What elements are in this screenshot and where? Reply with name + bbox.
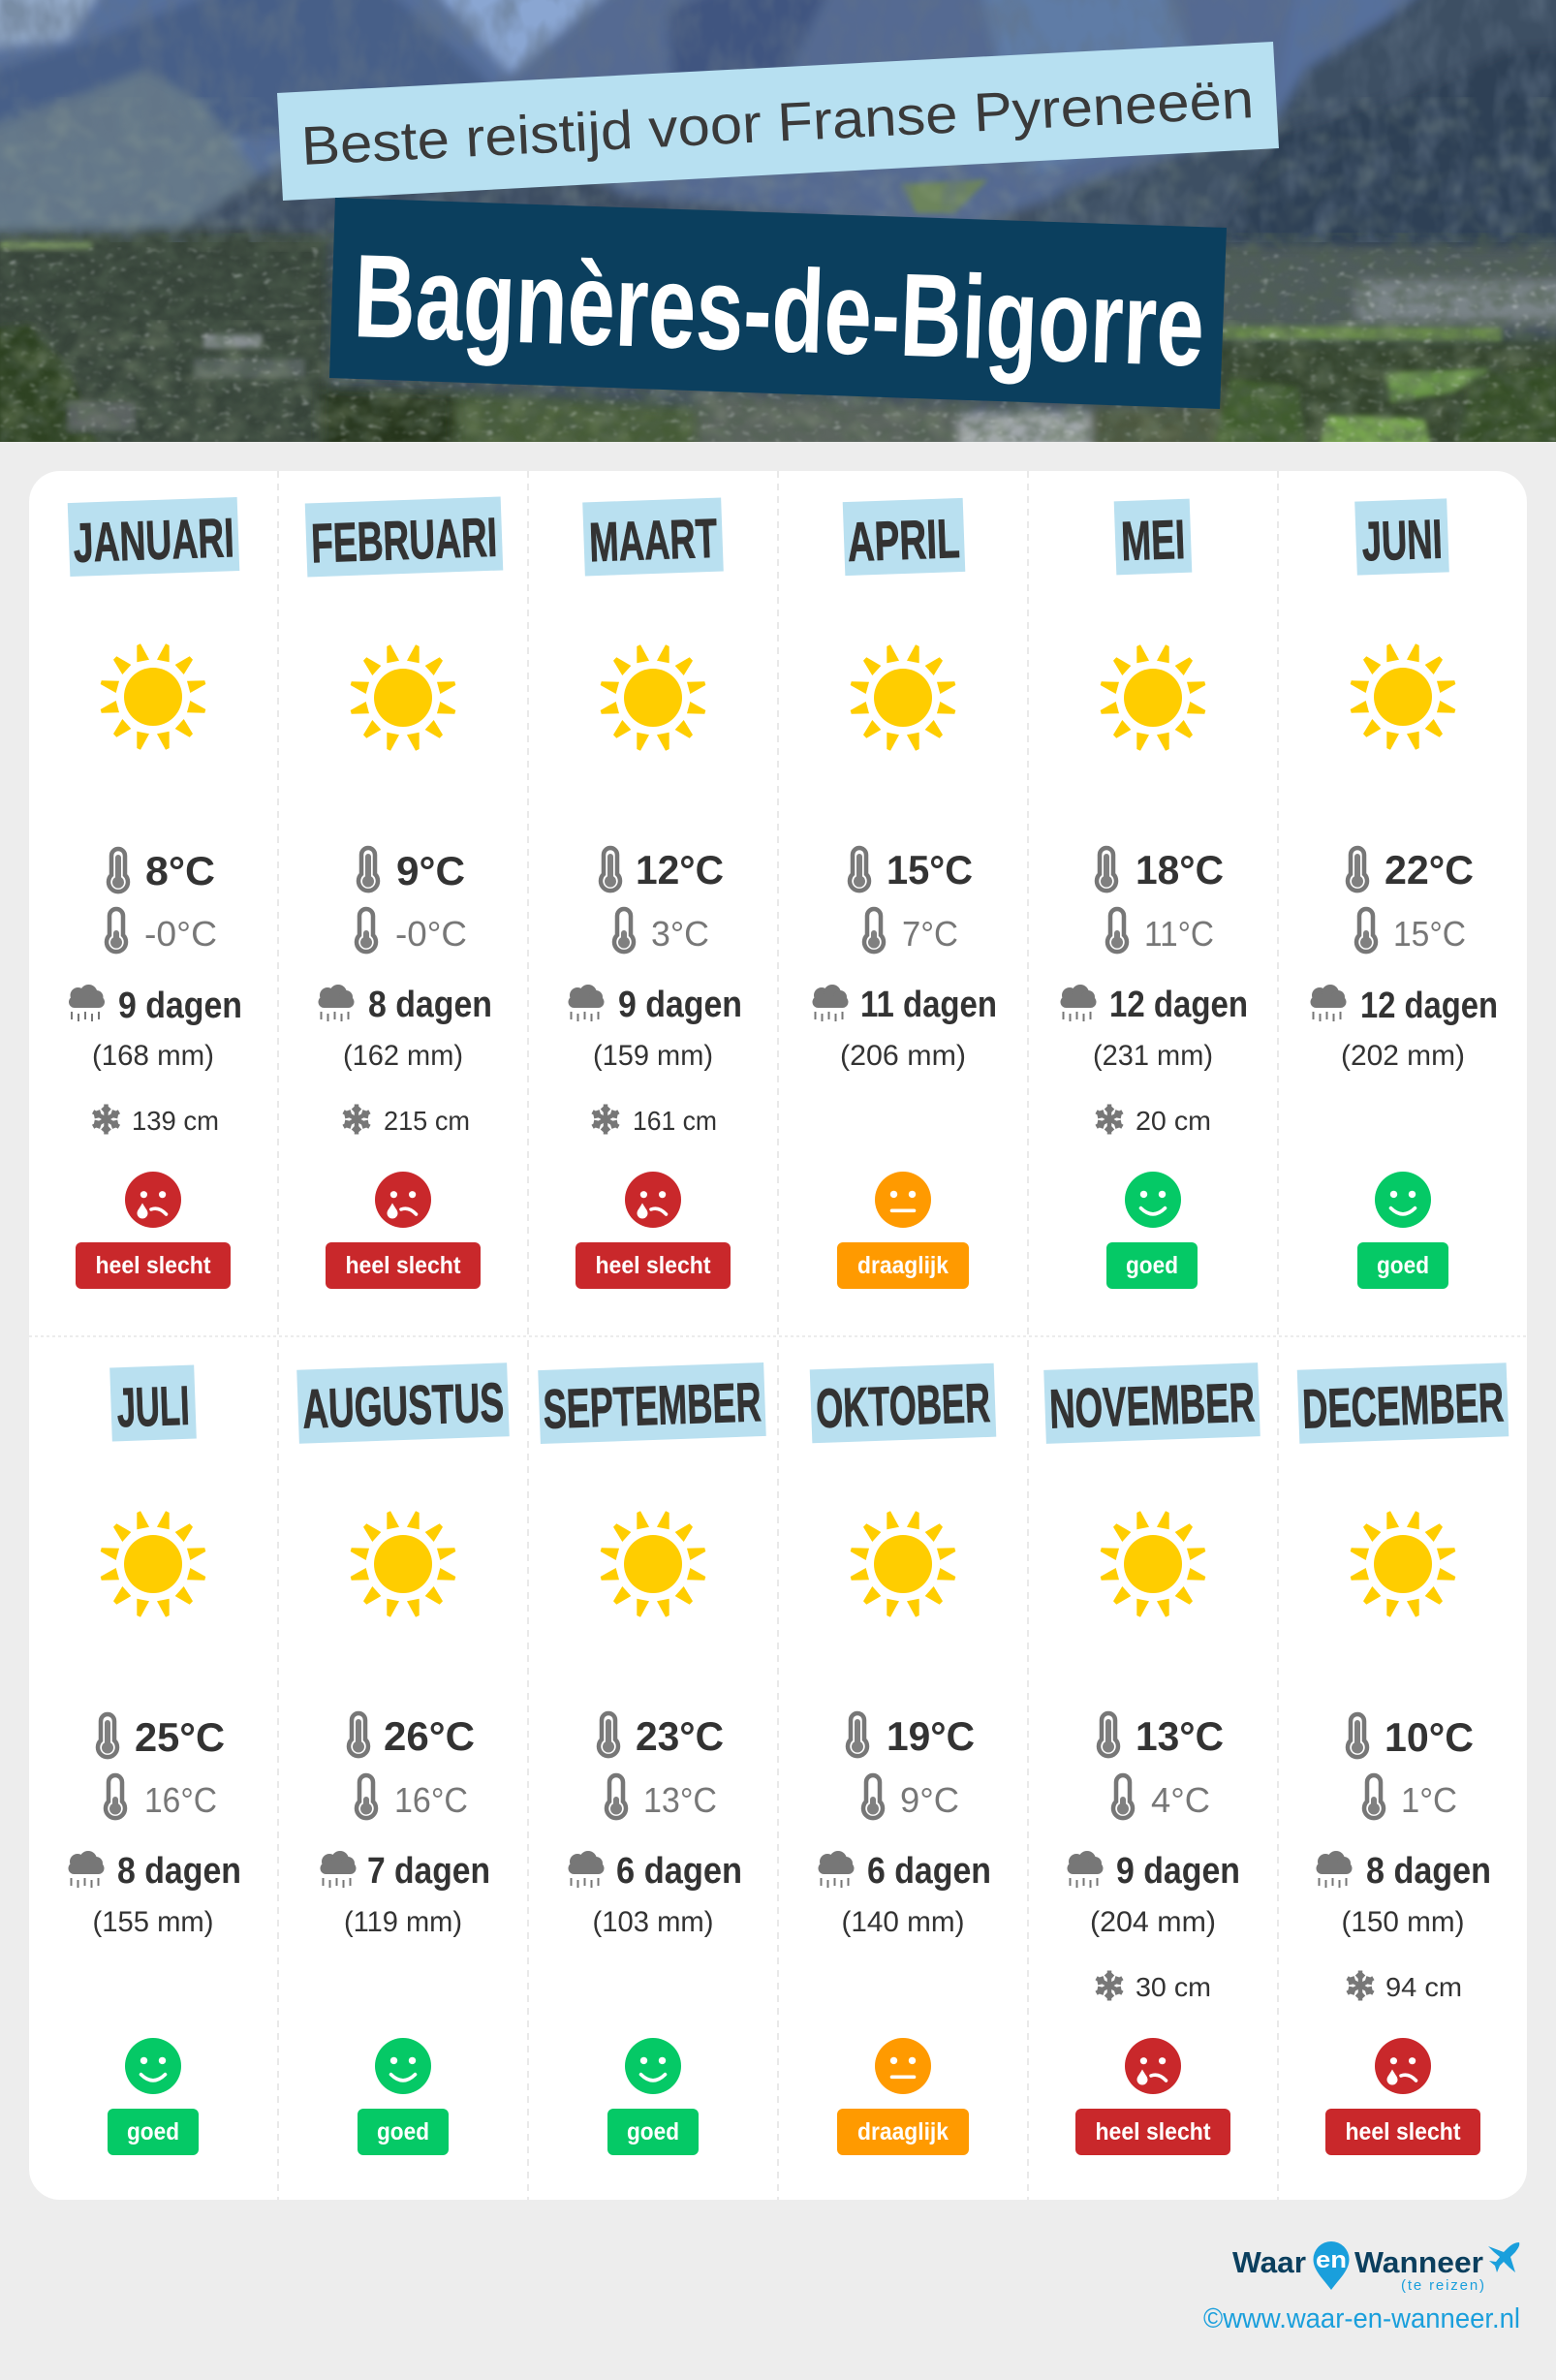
high temperature: 18°C [1136,847,1224,892]
icon: sun [851,1511,955,1617]
rating icon [1375,2038,1431,2094]
rating badge: goed [377,2118,429,2145]
high temperature: 10°C [1385,1714,1474,1760]
low temperature [106,1775,217,1820]
rating badge: draaglijk [857,1252,949,1279]
rain days: 6 dagen [867,1851,991,1892]
high temperature: 23°C [636,1713,724,1759]
month label [109,1365,197,1441]
icon: sun [1101,1511,1205,1617]
low temperature: 13°C [643,1780,717,1820]
rain days [568,1851,742,1892]
high temperature: 8°C [145,848,215,893]
icon: sun [1101,644,1205,751]
rating badge: goed [1126,1252,1178,1279]
low temperature: 16°C [144,1780,217,1820]
precipitation: (140 mm) [841,1906,965,1938]
rating icon [1125,1172,1181,1228]
rating badge: goed [627,2118,679,2145]
rain days [812,985,997,1025]
website credit: ©www.waar-en-wanneer.nl [1203,2303,1520,2334]
rain days: 12 dagen [1109,985,1248,1025]
high temperature: 9°C [396,848,465,893]
high temperature: 22°C [1385,847,1474,892]
rating badge: heel slecht [345,1252,461,1279]
panel: november [1043,1362,1260,2155]
low temperature [1113,1775,1210,1820]
rating badge [1106,1242,1198,1289]
high temperature [848,1713,975,1759]
rain days: 7 dagen [367,1851,490,1892]
month label: APRIL [847,508,961,574]
low temperature [864,909,958,954]
rain days [318,985,492,1025]
rating badge [576,1242,731,1289]
month label [68,497,239,577]
high temperature [850,847,973,892]
panel: januari [68,497,242,1289]
precipitation: (103 mm) [593,1906,713,1938]
rain days: 9 dagen [1116,1851,1240,1892]
rating badge: heel slecht [1095,2118,1211,2145]
panel: maart [568,498,742,1289]
rain days: 8 dagen [117,1851,241,1892]
rain days: 8 dagen [1366,1851,1491,1892]
icon: sun [851,644,955,751]
low temperature: 16°C [394,1780,468,1820]
month label: MEI [1120,509,1186,573]
icon: sun [1351,643,1455,750]
rating icon [375,2038,431,2094]
low temperature [1364,1775,1457,1820]
high temperature [599,1713,724,1759]
subtitle banner [277,42,1279,201]
logo: Waar en Wanneer: (te reizen) [1401,2277,1484,2294]
snow [1095,1105,1211,1136]
high temperature [109,848,215,893]
low temperature [107,909,217,954]
precipitation: (231 mm) [1093,1040,1213,1072]
high temperature [1099,1713,1224,1759]
subtitle banner: Beste reistijd voor Franse Pyreneeën [299,68,1255,176]
snow [91,1105,219,1136]
low temperature [357,909,467,954]
snow [1095,1971,1211,2002]
icon: sun [601,1511,705,1617]
rain days: 6 dagen [616,1851,742,1892]
high temperature: 26°C [384,1713,475,1759]
rating icon [125,2038,181,2094]
month label [305,496,503,578]
month label: JULI [116,1375,191,1439]
logo: Waar en Wanneer: en [1316,2247,1347,2273]
icon: sun [351,1511,455,1617]
month label: AUGUSTUS [301,1371,505,1441]
rating badge [1357,1242,1448,1289]
snow: 161 cm [633,1106,717,1136]
rain days [1060,985,1248,1025]
rain days [818,1851,991,1892]
low temperature [614,909,709,954]
title banner [329,198,1227,409]
month label [538,1362,766,1444]
rating icon [375,1172,431,1228]
low temperature [607,1775,717,1820]
rating badge [1075,2109,1230,2155]
precipitation: (119 mm) [344,1906,462,1938]
rating badge: heel slecht [595,1252,711,1279]
panel: juni [1310,498,1498,1289]
rain days [568,985,742,1025]
low temperature [1356,909,1466,954]
rating badge [76,1242,231,1289]
rating badge [607,2109,699,2155]
rating badge [358,2109,449,2155]
calendar card background [29,471,1527,2200]
high temperature: 25°C [135,1714,225,1760]
panel: februari [305,496,503,1289]
rating icon [625,1172,681,1228]
rain days: 9 dagen [618,985,742,1025]
precipitation: (168 mm) [92,1040,214,1072]
high temperature [358,848,465,893]
high temperature: 12°C [636,847,724,892]
low temperature [863,1775,959,1820]
month label: JANUARI [73,507,235,575]
icon: sun [601,644,705,751]
icon: sun [101,1511,205,1617]
rating badge: heel slecht [1345,2118,1461,2145]
icon: airplane [1488,2242,1519,2272]
snow: 94 cm [1385,1972,1462,2002]
rating icon [875,2038,931,2094]
month label [296,1362,510,1444]
low temperature: 15°C [1393,914,1466,954]
panel: juli [68,1365,241,2155]
month label [1354,498,1449,576]
rain days [69,985,242,1026]
rating icon [1125,2038,1181,2094]
rating badge: goed [1377,1252,1429,1279]
high temperature [1348,1714,1474,1760]
panel: mei [1060,499,1248,1289]
icon: sun [351,644,455,751]
low temperature: 7°C [902,914,958,954]
low temperature [1107,909,1214,954]
rain days [1068,1851,1240,1892]
low temperature: 11°C [1144,914,1214,954]
logo: Waar en Wanneer [1232,2241,1519,2294]
high temperature: 15°C [887,847,973,892]
logo: Waar en Wanneer: Wanneer [1354,2245,1483,2279]
icon: sun [101,643,205,750]
rating icon [1375,1172,1431,1228]
header photo: Pyrenees valley [0,0,1556,455]
snow: 139 cm [132,1106,219,1136]
panel: september [538,1362,766,2155]
low temperature: 1°C [1401,1780,1457,1820]
rating badge: draaglijk [857,2118,949,2145]
rating icon [875,1172,931,1228]
snow: 20 cm [1136,1106,1211,1136]
rain days: 9 dagen [118,986,242,1026]
rain days [68,1851,241,1892]
high temperature: 13°C [1136,1713,1224,1759]
icon: sun [1351,1511,1455,1617]
month label: OKTOBER [815,1372,991,1440]
rating icon [125,1172,181,1228]
month label: MAART [588,508,718,574]
rating icon [625,2038,681,2094]
rain days: 8 dagen [368,985,492,1025]
panel: augustus [296,1362,510,2155]
high temperature [1348,847,1474,892]
low temperature: 3°C [651,914,709,954]
month label [1043,1362,1260,1444]
snow: 215 cm [384,1106,470,1136]
month label: SEPTEMBER [543,1371,762,1441]
low temperature: 9°C [900,1780,959,1820]
rating badge [837,1242,969,1289]
rain days [320,1851,490,1892]
precipitation: (162 mm) [343,1040,463,1072]
title banner: Bagnères-de-Bigorre [352,230,1206,391]
low temperature [357,1775,468,1820]
precipitation: (206 mm) [840,1040,966,1072]
snow [342,1105,470,1136]
snow [591,1105,717,1136]
low temperature: -0°C [144,914,217,954]
month label: FEBRUARI [310,507,498,575]
rating badge [837,2109,969,2155]
precipitation: (155 mm) [93,1906,213,1938]
rating badge [326,1242,481,1289]
month label [1114,499,1192,575]
panel: december [1297,1362,1509,2155]
precipitation: (159 mm) [593,1040,713,1072]
rain days: 11 dagen [860,985,997,1025]
high temperature [1097,847,1224,892]
month label: JUNI [1361,509,1444,573]
rating badge: goed [127,2118,179,2145]
panel: april [812,498,997,1289]
panel: oktober [810,1363,996,2155]
rain days: 12 dagen [1360,986,1498,1026]
month label [810,1363,996,1443]
rating badge: heel slecht [95,1252,211,1279]
snow [1346,1971,1462,2002]
month label: NOVEMBER [1048,1371,1256,1441]
rain days [1316,1851,1491,1892]
precipitation: (150 mm) [1341,1906,1465,1938]
low temperature: -0°C [395,914,467,954]
rating badge [1325,2109,1480,2155]
snow: 30 cm [1136,1972,1211,2002]
rating badge [108,2109,199,2155]
rain days [1310,985,1498,1026]
month label [843,498,965,576]
logo: Waar en Wanneer: Waar [1232,2245,1306,2279]
low temperature: 4°C [1151,1780,1210,1820]
precipitation: (202 mm) [1341,1040,1465,1072]
precipitation: (204 mm) [1090,1906,1216,1938]
month label [582,498,724,576]
icon: map pin [1314,2241,1349,2290]
high temperature: 19°C [887,1713,975,1759]
